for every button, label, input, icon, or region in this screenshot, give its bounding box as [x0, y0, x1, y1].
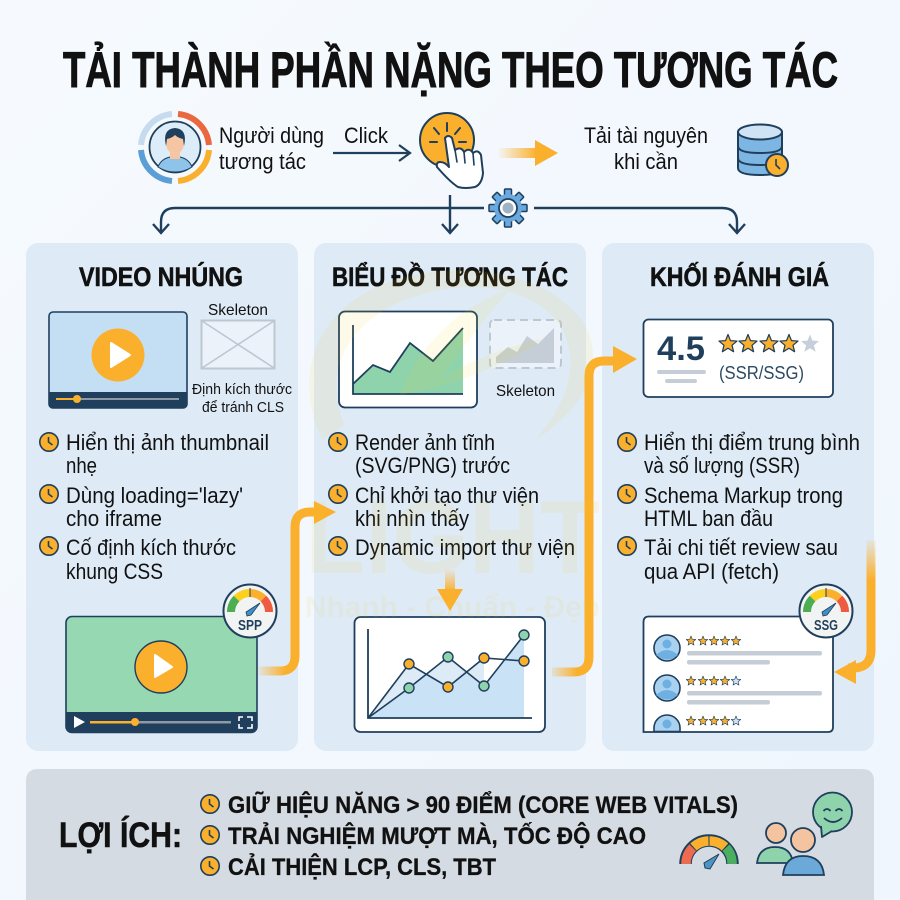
label: user interacts line 2: tương tác: [219, 149, 306, 174]
skeleton box: [202, 320, 274, 368]
arrows: branch connector: [153, 195, 745, 233]
gauge: SPP: [224, 584, 276, 638]
rating card: [644, 320, 833, 397]
watermark: [305, 270, 600, 624]
label: click: Click: [344, 123, 389, 148]
review list card: [644, 616, 833, 732]
bullet list: chart: Render ảnh tĩnh: [355, 430, 495, 455]
panel: interactive chart: [314, 243, 586, 751]
skeleton label: Skeleton: [496, 383, 555, 400]
video player: [66, 616, 257, 733]
bullet list: video: khung CSS: [66, 559, 163, 584]
bullet list: benefits: GIỮ HIỆU NĂNG > 90 ĐIỂM (CORE WEB VITALS): [228, 791, 738, 819]
rating card: (SSR/SSG): [719, 363, 804, 383]
gauge: SSG: [800, 584, 852, 638]
bullet list: benefits: TRẢI NGHIỆM MƯỢT MÀ, TỐC ĐỘ CAO: [228, 821, 646, 850]
bullet list: chart: khi nhìn thấy: [355, 506, 470, 531]
bullet list: video: Dùng loading='lazy': [66, 483, 243, 508]
bullet list: video: Cố định kích thước: [66, 535, 236, 560]
icon: gear: [489, 189, 527, 227]
bullet list: reviews: và số lượng (SSR): [644, 453, 800, 478]
heading: reviews block: KHỐI ĐÁNH GIÁ: [650, 260, 829, 292]
bullet list: video: [40, 430, 269, 584]
watermark: LIGHT: [305, 480, 600, 596]
bullet list: video: Hiển thị ảnh thumbnail: [66, 430, 269, 455]
thumbnail video: [49, 312, 187, 408]
bullet list: reviews: Hiển thị điểm trung bình: [644, 430, 860, 455]
panel: video embed: [26, 243, 298, 751]
arrow: reviews to list: [834, 540, 871, 684]
icon: user avatar: [141, 114, 209, 181]
label: load resources: Tải tài nguyên: [584, 123, 708, 148]
label: user interacts: Người dùng: [219, 123, 324, 148]
bullet list: chart: Dynamic import thư viện: [355, 535, 575, 560]
bullet list: benefits: CẢI THIỆN LCP, CLS, TBT: [228, 852, 496, 881]
bullet list: benefits: [201, 791, 738, 881]
icon: happy users: [757, 792, 852, 875]
icon: click hand: [420, 113, 483, 188]
panel: reviews block: [602, 243, 874, 751]
bullet list: video: cho iframe: [66, 506, 162, 531]
bullet list: reviews: [618, 430, 860, 584]
note: avoid CLS: để tránh CLS: [202, 399, 284, 416]
icon: performance gauge: [686, 840, 732, 869]
flow: user interaction row: [141, 113, 788, 188]
arrow: to click: [333, 145, 410, 161]
interactive line chart: [354, 617, 545, 732]
panel: benefits: [26, 769, 874, 900]
bullet list: reviews: HTML ban đầu: [644, 506, 773, 531]
gauge: SPP: SPP: [238, 618, 262, 634]
heading: video embed: VIDEO NHÚNG: [79, 261, 243, 292]
skeleton label: Skeleton: [208, 302, 268, 319]
label: load resources line 2: khi cần: [614, 149, 678, 174]
bullet list: reviews: qua API (fetch): [644, 559, 779, 584]
watermark: Nhanh - Chuẩn - Đẹp: [305, 591, 600, 624]
gauge: SSG: SSG: [814, 618, 838, 634]
bullet list: chart: Chỉ khởi tạo thư viện: [355, 483, 539, 508]
skeleton chart: [490, 320, 561, 368]
bullet list: reviews: Tải chi tiết review sau: [644, 535, 838, 560]
icon: database clock: [738, 124, 788, 176]
arrow: video to chart: [258, 501, 336, 671]
bullet list: chart: [329, 430, 575, 560]
arrow: load on demand: [497, 140, 558, 166]
static chart: [339, 312, 477, 408]
arrow: chart to reviews: [552, 346, 637, 672]
bullet list: chart: (SVG/PNG) trước: [355, 453, 510, 478]
heading: benefits: LỢI ÍCH:: [59, 815, 182, 855]
rating card: 4.5: [657, 330, 705, 368]
note: fixed size: Định kích thước: [192, 381, 292, 398]
arrow: down to chart: [437, 570, 463, 611]
bullet list: reviews: Schema Markup trong: [644, 483, 843, 508]
bullet list: video: nhẹ: [66, 453, 97, 478]
heading: interactive chart: BIỂU ĐỒ TƯƠNG TÁC: [332, 261, 568, 292]
